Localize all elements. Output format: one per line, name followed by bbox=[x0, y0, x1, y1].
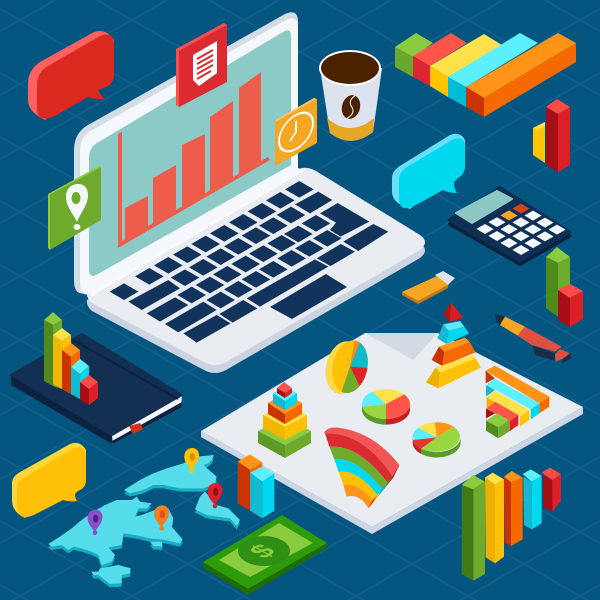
charts on paper bbox=[321, 337, 549, 508]
world map with pins bbox=[48, 448, 240, 587]
paper sheet with charts bbox=[201, 333, 583, 534]
notebook bbox=[11, 334, 182, 444]
coffee cup bbox=[319, 50, 382, 141]
cone pyramid chart bbox=[426, 303, 481, 388]
bars on notebook bbox=[44, 312, 98, 405]
speech bubble: blue bbox=[392, 134, 465, 209]
triangular stacked bars bbox=[486, 366, 549, 438]
pin: orange bbox=[154, 505, 169, 531]
banknote bbox=[203, 515, 327, 595]
bookmark bbox=[129, 423, 143, 434]
app icon: document bbox=[176, 23, 227, 107]
laptop base bbox=[87, 168, 425, 373]
app icon: clock bbox=[275, 98, 317, 166]
calculator keys bbox=[476, 204, 566, 255]
isometric bars: red and yellow bbox=[533, 99, 570, 172]
marker pen bbox=[495, 314, 571, 363]
isometric bars: top right row bbox=[395, 33, 576, 117]
second flat pie chart bbox=[413, 422, 461, 457]
pin: red bbox=[208, 483, 222, 508]
usb stick bbox=[402, 271, 455, 304]
calculator bbox=[450, 188, 569, 264]
isometric bars: green and red bbox=[546, 247, 583, 327]
pin: yellow bbox=[184, 448, 199, 473]
speech bubble: yellow bbox=[12, 443, 86, 518]
stepped pyramid bbox=[258, 382, 311, 458]
isometric bars: bottom right bbox=[462, 468, 561, 581]
calculator display bbox=[456, 191, 512, 223]
coffee bean bbox=[339, 93, 363, 121]
app icon: map pin bbox=[48, 166, 101, 250]
screen bar chart bbox=[118, 72, 270, 248]
laptop screen bbox=[74, 12, 298, 294]
keyboard bbox=[110, 181, 388, 343]
paper fold bbox=[365, 333, 438, 360]
trackpad bbox=[270, 274, 347, 319]
dollar sign: $ bbox=[242, 539, 282, 562]
speech bubble: red bbox=[28, 31, 114, 120]
pin: purple bbox=[88, 510, 102, 535]
rainbow fan chart bbox=[324, 428, 399, 508]
vertical pie chart bbox=[321, 337, 373, 397]
flat pie chart bbox=[362, 389, 410, 425]
bars: orange and blue bbox=[238, 454, 274, 518]
laptop bbox=[74, 12, 425, 373]
